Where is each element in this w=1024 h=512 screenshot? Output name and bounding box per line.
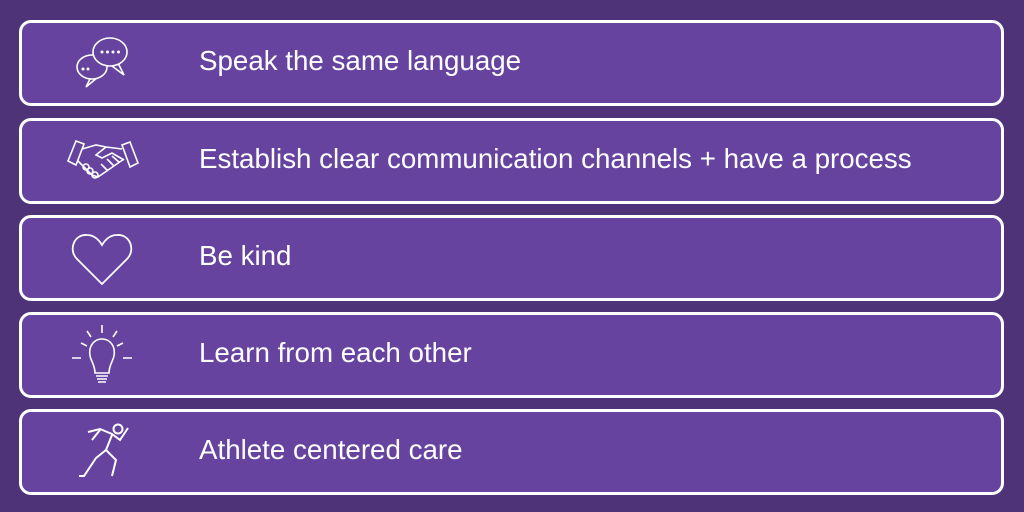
icon: heart bbox=[72, 234, 132, 286]
text: Speak the same language bbox=[199, 45, 521, 76]
text: Establish clear communication channels + have a process bbox=[199, 143, 912, 174]
panel: be kind bbox=[19, 215, 1004, 301]
text: Athlete centered care bbox=[199, 434, 463, 465]
icon: light bulb bbox=[72, 325, 132, 383]
panel: speak the same language bbox=[19, 20, 1004, 106]
icon: handshake bbox=[67, 140, 139, 179]
icon: speech bubbles bbox=[76, 37, 128, 88]
text: Be kind bbox=[199, 240, 291, 271]
panel: learn from each other bbox=[19, 312, 1004, 398]
icon: runner bbox=[79, 424, 129, 477]
panel: communication channels bbox=[19, 118, 1004, 204]
text: Learn from each other bbox=[199, 337, 472, 368]
panel: athlete centered care bbox=[19, 409, 1004, 495]
